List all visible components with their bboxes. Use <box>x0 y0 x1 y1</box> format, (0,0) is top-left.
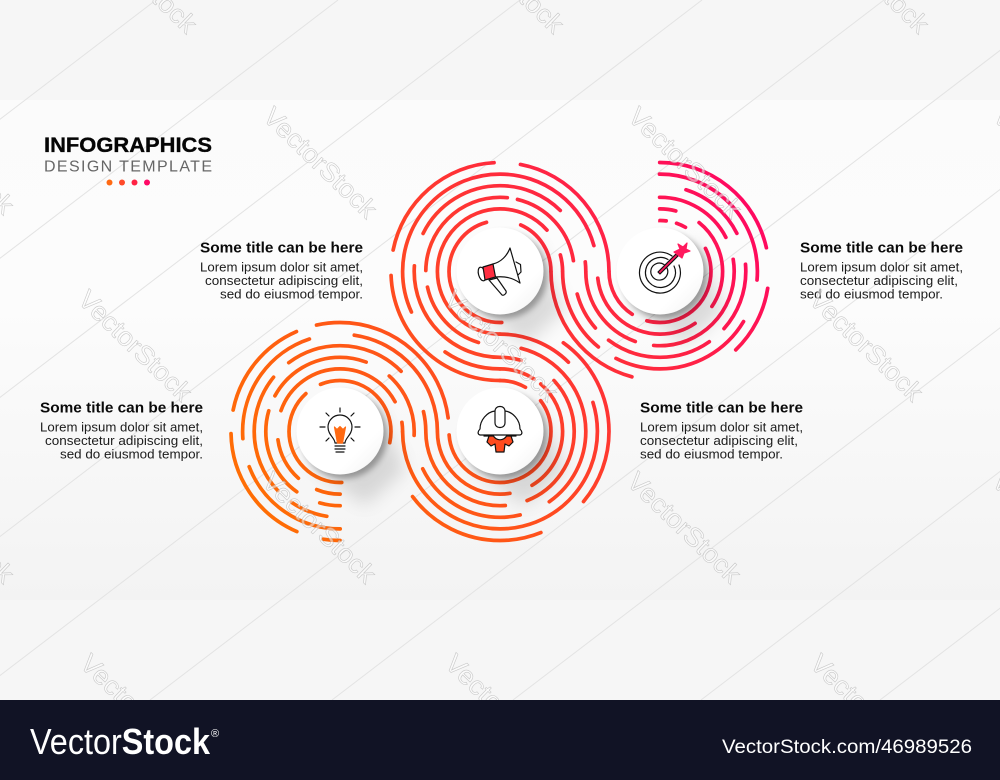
text block: target step: sed do eiusmod tempor. <box>800 288 943 302</box>
text block: target step <box>800 240 963 302</box>
node: megaphone <box>456 228 565 345</box>
icon: light bulb <box>320 408 360 452</box>
text block: megaphone step <box>200 240 363 302</box>
text block: bulb step: Lorem ipsum dolor sit amet, <box>40 420 203 434</box>
footer logo: VectorStock <box>30 721 211 762</box>
text block: helmet step: consectetur adipiscing elit, <box>640 434 798 448</box>
text block: bulb step: sed do eiusmod tempor. <box>60 448 203 462</box>
watermarks: VectorStock <box>72 284 199 408</box>
footer bar <box>0 700 1000 780</box>
text block: megaphone step: sed do eiusmod tempor. <box>220 288 363 302</box>
text block: megaphone step: consectetur adipiscing elit, <box>205 274 363 288</box>
rings: target step <box>551 162 769 380</box>
text block: bulb step <box>40 400 203 462</box>
rings: bulb step <box>231 322 449 540</box>
icon: helmet and gear <box>478 406 522 452</box>
text block: megaphone step: Some title can be here <box>200 240 363 256</box>
watermarks: VectorStock <box>438 284 565 408</box>
rings: megaphone step <box>391 162 609 380</box>
text block: target step: consectetur adipiscing elit, <box>800 274 958 288</box>
icon: target <box>639 243 690 293</box>
watermarks: VectorStock <box>439 648 566 772</box>
title <box>44 133 212 186</box>
watermarks: VectorStock <box>257 101 384 225</box>
node: target <box>616 228 725 345</box>
text block: helmet step: Lorem ipsum dolor sit amet, <box>640 420 803 434</box>
watermarks: VectorStock <box>804 648 931 772</box>
text block: target step: Lorem ipsum dolor sit amet, <box>800 260 963 274</box>
text block: helmet step: sed do eiusmod tempor. <box>640 448 783 462</box>
node: helmet <box>456 388 565 505</box>
watermarks: VectorStock <box>74 648 201 772</box>
title: INFOGRAPHICS <box>44 133 212 157</box>
registered mark: ® <box>211 728 219 740</box>
rings: helmet step <box>391 322 609 540</box>
text block: bulb step: consectetur adipiscing elit, <box>45 434 203 448</box>
watermarks: VectorStock <box>621 466 748 590</box>
title dots <box>106 180 150 186</box>
text block: target step: Some title can be here <box>800 240 963 256</box>
watermarks: VectorStock <box>803 284 930 408</box>
concentric ring chart <box>231 162 769 540</box>
watermarks: VectorStock <box>622 101 749 225</box>
text block: helmet step: Some title can be here <box>640 400 803 416</box>
node: light bulb <box>296 388 405 505</box>
icon: megaphone <box>477 248 521 295</box>
text block: bulb step: Some title can be here <box>40 400 203 416</box>
footer url: VectorStock.com/46989526 <box>722 737 972 758</box>
watermarks: VectorStock <box>256 466 383 590</box>
title: DESIGN TEMPLATE <box>44 158 212 176</box>
text block: helmet step <box>640 400 803 462</box>
text block: megaphone step: Lorem ipsum dolor sit amet, <box>200 260 363 274</box>
